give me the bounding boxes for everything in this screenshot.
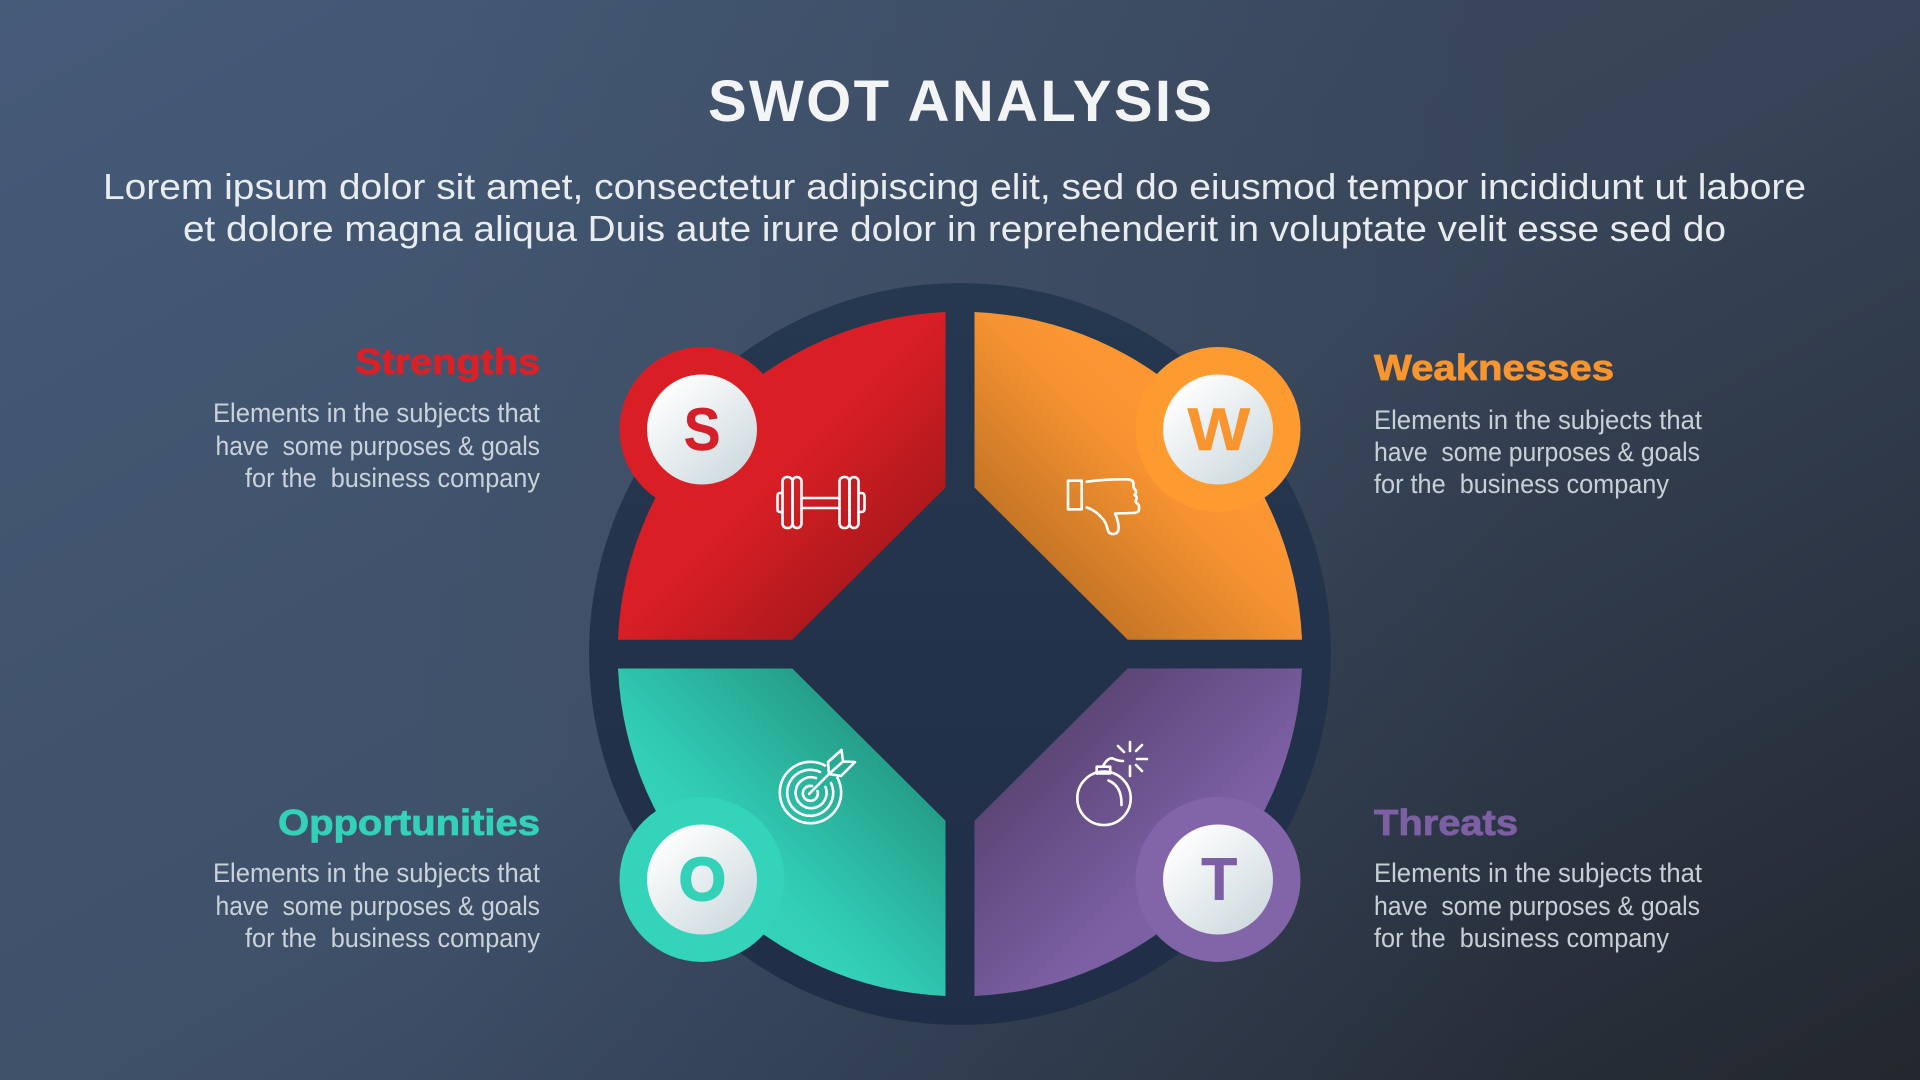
text block: opportunities: for the business company bbox=[245, 923, 540, 953]
text block: threats: for the business company bbox=[1374, 923, 1669, 953]
panel: circular SWOT diagram bbox=[589, 283, 1331, 1025]
text block: threats bbox=[1374, 802, 1702, 953]
text block: opportunities bbox=[213, 802, 540, 953]
text block: opportunities: have some purposes & goals bbox=[216, 891, 540, 921]
icon: dumbbell bbox=[778, 477, 864, 528]
icon: target with arrow bbox=[780, 750, 855, 823]
icon: thumbs down bbox=[1068, 479, 1139, 534]
panel: opportunities segment bbox=[618, 668, 946, 996]
text block: threats: Threats bbox=[1374, 802, 1518, 843]
text block: opportunities: Opportunities bbox=[278, 802, 540, 843]
panel: threats segment: T bbox=[1201, 846, 1237, 913]
panel: strengths segment: S bbox=[684, 396, 720, 463]
subtitle bbox=[103, 166, 1806, 249]
text block: weaknesses: Elements in the subjects that bbox=[1374, 405, 1702, 435]
text block: weaknesses: Weaknesses bbox=[1374, 347, 1614, 388]
text block: strengths bbox=[213, 341, 540, 493]
panel: strengths segment bbox=[618, 312, 946, 640]
text block: weaknesses: have some purposes & goals bbox=[1374, 437, 1700, 467]
text block: threats: Elements in the subjects that bbox=[1374, 858, 1702, 888]
panel: threats segment bbox=[974, 668, 1302, 996]
text block: strengths: for the business company bbox=[245, 463, 540, 493]
text block: strengths: Strengths bbox=[355, 341, 540, 382]
text block: opportunities: Elements in the subjects that bbox=[213, 858, 540, 888]
panel: opportunities segment: O bbox=[679, 846, 726, 913]
text block: weaknesses: for the business company bbox=[1374, 469, 1669, 499]
central dark circle bbox=[589, 283, 1331, 1025]
text block: weaknesses bbox=[1374, 347, 1702, 499]
title: SWOT ANALYSIS bbox=[708, 69, 1212, 134]
icon: bomb bbox=[1077, 742, 1147, 825]
subtitle: et dolore magna aliqua Duis aute irure dolor in reprehenderit in voluptate velit esse sed do bbox=[183, 208, 1726, 249]
text block: strengths: have some purposes & goals bbox=[216, 431, 540, 461]
panel: weaknesses segment: W bbox=[1188, 396, 1251, 463]
text block: strengths: Elements in the subjects that bbox=[213, 398, 540, 428]
panel: weaknesses segment bbox=[974, 312, 1302, 640]
text block: threats: have some purposes & goals bbox=[1374, 891, 1700, 921]
subtitle: Lorem ipsum dolor sit amet, consectetur adipiscing elit, sed do eiusmod tempor incididunt ut labore bbox=[103, 166, 1806, 207]
